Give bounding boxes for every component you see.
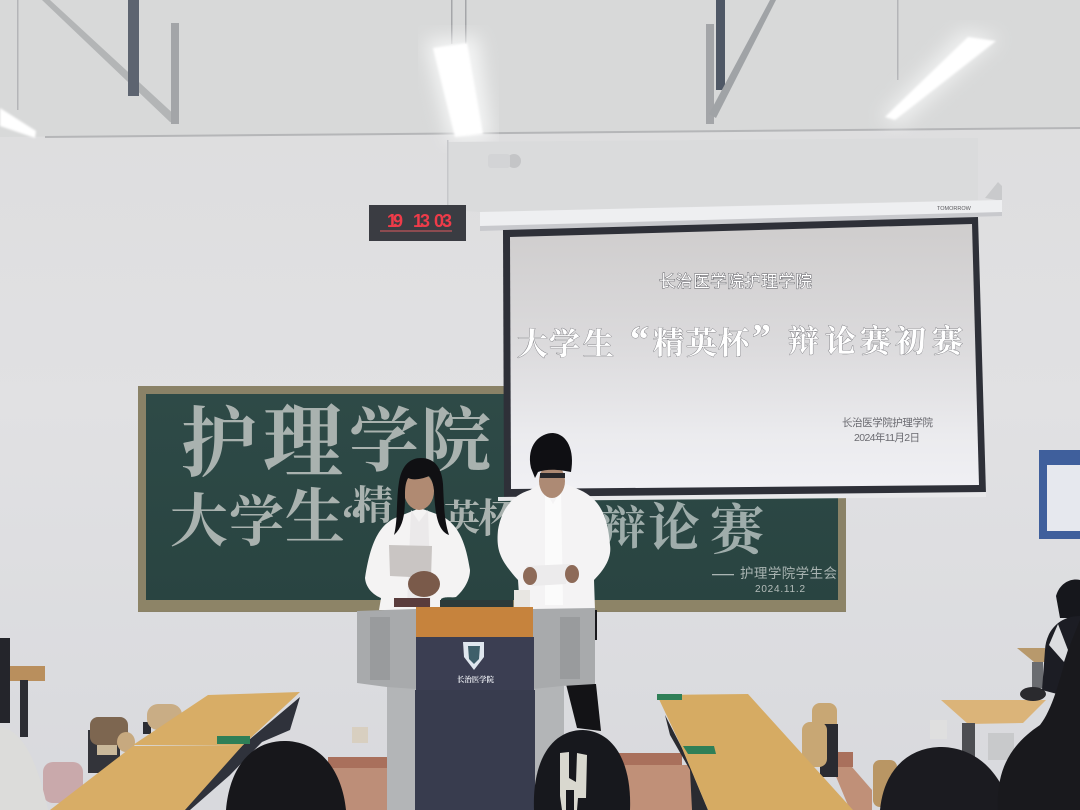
chalk heading line 2: 精	[353, 483, 393, 528]
shirt and arms	[498, 484, 610, 610]
head far right	[998, 620, 1080, 810]
audience heads	[226, 620, 1080, 810]
face	[404, 472, 434, 510]
chalk heading line 1: 院	[421, 404, 491, 481]
books	[394, 598, 430, 607]
paper	[389, 545, 432, 578]
screen footer	[842, 416, 934, 444]
screen title: 初	[895, 324, 926, 359]
chalk heading line 1: 护	[181, 403, 257, 487]
screen footer: 2024年11月2日	[854, 431, 920, 444]
chair backs left	[43, 704, 182, 803]
screen title: 辩	[788, 324, 819, 359]
projector screen	[498, 217, 986, 501]
chalk heading line 2: 辩	[600, 503, 646, 554]
chalk heading line 2: 大	[170, 489, 228, 554]
male speaker	[498, 433, 610, 731]
wall socket	[352, 727, 368, 743]
projector mount on wall	[447, 138, 1002, 212]
screen title	[517, 317, 966, 362]
chalk heading line 1: 学	[349, 404, 419, 481]
lectern top	[416, 607, 533, 637]
trousers	[566, 684, 601, 731]
chalkboard	[138, 386, 846, 612]
screen title: 学	[549, 327, 580, 362]
chalk heading line 2: 论	[648, 501, 700, 558]
projector screen housing: TOMORROW	[937, 206, 972, 212]
ceiling beam right	[451, 0, 898, 124]
digital clock: 03	[434, 211, 452, 231]
ceiling lights	[0, 30, 1000, 142]
screen heading: organiser: 长治医学院护理学院	[659, 272, 812, 291]
ceiling	[0, 0, 1080, 138]
chalk signature: 护理学院学生会	[740, 566, 837, 581]
chalk heading line 2	[170, 483, 768, 561]
reading paper	[526, 564, 570, 586]
head right	[880, 747, 1010, 810]
face	[539, 464, 565, 498]
screen title: 论	[825, 324, 856, 359]
head centre with hair clip	[534, 730, 630, 810]
wall poster right	[1039, 450, 1080, 539]
college name: 长治医学院	[457, 674, 494, 684]
lectern side wings	[357, 609, 416, 689]
skirting board	[328, 752, 872, 810]
screen title: 杯	[718, 326, 752, 361]
lectern	[357, 600, 595, 810]
female speaker	[365, 458, 470, 610]
hands	[408, 571, 440, 597]
ceiling beam left	[17, 0, 179, 124]
digital clock: 19	[387, 211, 403, 231]
lectern column	[387, 686, 564, 810]
college emblem	[463, 642, 484, 670]
chalk signature: 2024.11.2	[755, 584, 805, 595]
small white cup	[514, 590, 530, 608]
microphone base on lectern	[440, 600, 513, 607]
screen title: 赛	[860, 324, 894, 359]
lectern front panel	[416, 637, 534, 690]
chalk signature	[712, 566, 837, 595]
desks left	[50, 692, 300, 810]
screen title: 生	[583, 327, 614, 362]
digital clock	[369, 205, 466, 241]
screen title: “	[630, 319, 649, 361]
chalk heading line 2: 学	[229, 492, 284, 553]
head left	[226, 741, 346, 810]
chalk heading line 2: 英	[444, 498, 480, 538]
hair	[394, 458, 449, 535]
right desk and student	[941, 580, 1080, 760]
digital clock: 13	[413, 211, 430, 231]
screen title: 英	[686, 326, 717, 361]
green tag	[217, 736, 250, 744]
shirt	[365, 508, 470, 610]
chalk heading line 2: 生	[285, 485, 345, 551]
hair	[530, 433, 572, 478]
screen title: 精	[653, 326, 684, 361]
glasses	[540, 473, 565, 478]
desks right	[657, 694, 897, 810]
screen title: 赛	[932, 324, 966, 359]
chalk heading line 1: 理	[263, 400, 343, 488]
wall socket right	[930, 720, 947, 739]
hands	[523, 567, 537, 585]
far-left desk and student	[0, 638, 48, 810]
screen title: ”	[752, 317, 771, 359]
chalk heading line 2: 杯	[478, 496, 521, 541]
screen title: 大	[517, 327, 548, 362]
chalk heading line 2: “	[342, 496, 362, 541]
screen footer: 长治医学院护理学院	[842, 416, 934, 429]
projector screen housing	[480, 200, 1002, 231]
chalk heading line 2: 赛	[710, 501, 768, 561]
chalk heading line 1	[181, 400, 491, 488]
